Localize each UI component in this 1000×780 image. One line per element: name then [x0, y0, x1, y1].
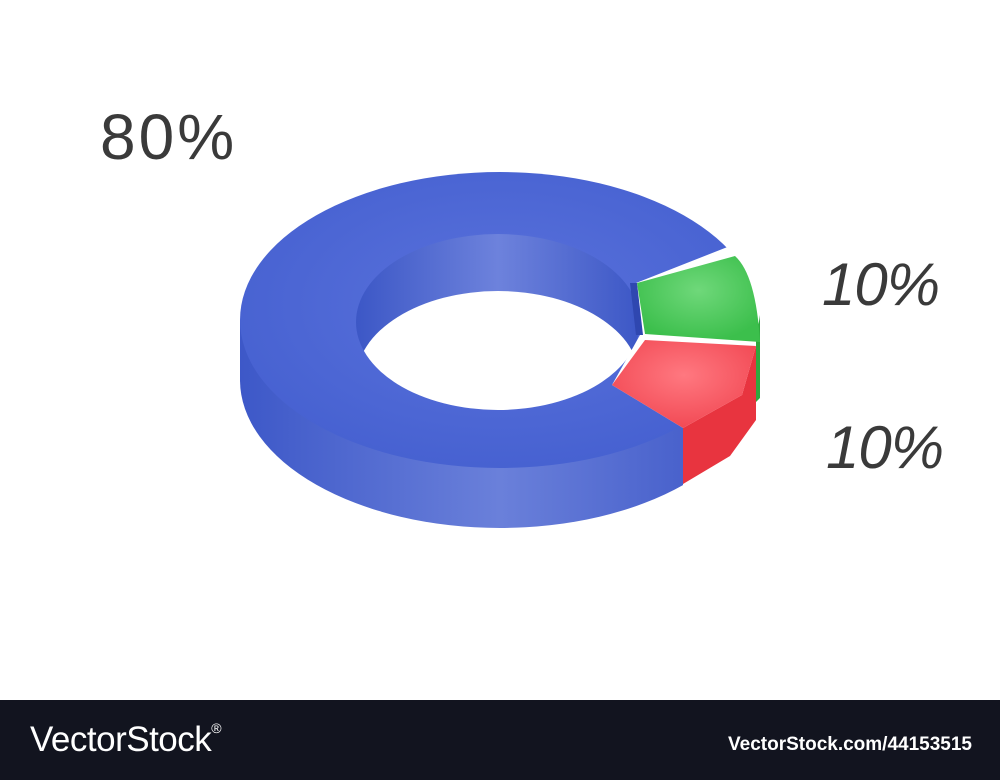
green segment 10% — [637, 256, 760, 402]
donut chart — [240, 172, 760, 528]
blue segment 80% — [240, 172, 726, 528]
footer — [0, 700, 1000, 780]
label 80%: 80% — [100, 101, 237, 173]
label 10% green: 10% — [822, 251, 939, 318]
url: VectorStock.com/44153515 — [728, 734, 972, 755]
label 10% red: 10% — [826, 414, 943, 481]
brand: VectorStock® — [30, 720, 221, 759]
red segment 10% — [612, 340, 756, 484]
